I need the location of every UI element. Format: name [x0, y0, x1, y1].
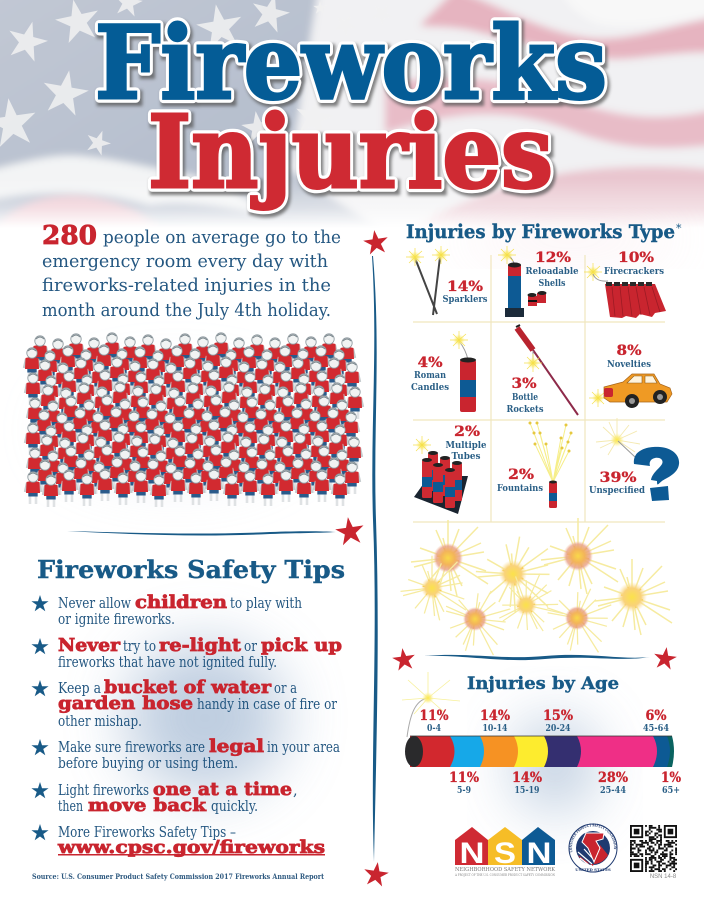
tip 1: to play with	[230, 596, 302, 612]
divider with stars above age chart	[391, 646, 678, 671]
age labels: bottom row	[449, 770, 681, 796]
age labels: bottom row: 15-19	[514, 786, 540, 796]
cell: bottle rockets	[506, 325, 578, 415]
tip 2: Never	[58, 635, 121, 656]
intro text block: emergency room every day with	[42, 251, 328, 272]
heading: injuries by type: Injuries by Fireworks Type	[406, 221, 675, 243]
cell: reloadable shells: Reloadable	[526, 267, 579, 277]
tip 2: try to	[123, 639, 156, 655]
logo: CPSC seal: UNITED STATES	[575, 867, 611, 872]
heading: injuries by type: *	[676, 222, 682, 235]
tip 1	[31, 592, 302, 628]
document code: NSN 14-8	[650, 874, 677, 880]
tip 4: Make sure fireworks are	[58, 740, 205, 756]
logo: neighborhood safety network	[454, 827, 556, 877]
logo: neighborhood safety network: N	[460, 837, 484, 870]
tip 3	[31, 677, 337, 730]
age labels: top row: 6%	[646, 708, 666, 724]
source note: Source: U.S. Consumer Product Safety Commission 2017 Fireworks Annual Report	[32, 872, 325, 881]
cell: reloadable shells: Shells	[538, 279, 566, 289]
logo: CPSC seal	[568, 823, 618, 872]
intro text block: month around the July 4th holiday.	[42, 300, 331, 321]
cell: bottle rockets: 3%	[512, 376, 536, 392]
cell: roman candles	[411, 331, 476, 412]
age labels: bottom row: 65+	[662, 786, 680, 796]
divider with star under crowd	[67, 515, 366, 546]
age labels: top row: 20-24	[546, 724, 570, 734]
tip 3: other mishap.	[58, 714, 142, 730]
age labels: top row: 14%	[480, 708, 510, 724]
cell: firecrackers: 10%	[618, 250, 654, 266]
age labels: top row: 0-4	[427, 724, 441, 734]
cell: roman candles: Roman	[414, 371, 446, 381]
cell: multiple tubes	[413, 424, 487, 514]
cell: sparklers: 14%	[447, 279, 483, 295]
cell: multiple tubes: Multiple	[446, 441, 487, 451]
age labels: top row: 15%	[543, 708, 573, 724]
panel: fireworks safety tips	[31, 555, 345, 858]
tip 6: website link: More Fireworks Safety Tips –	[58, 825, 236, 841]
logo: CPSC seal: CONSUMER PRODUCT SAFETY COMMISSION	[570, 823, 616, 852]
tip 4: before buying or using them.	[58, 756, 238, 772]
intro text block: 280	[42, 221, 97, 251]
age labels: top row: 11%	[420, 708, 448, 724]
tip 5: ,	[293, 783, 298, 799]
cell: novelties: 8%	[616, 343, 642, 359]
cell: sparklers	[406, 246, 488, 315]
tip 2: re-light	[159, 635, 242, 656]
cell: unspecified: 39%	[600, 470, 636, 486]
tip 5: quickly.	[211, 799, 258, 815]
tip 5: then	[58, 799, 83, 815]
cell: multiple tubes: 2%	[454, 424, 480, 440]
tip 6: website link: www.cpsc.gov/fireworks	[57, 837, 325, 858]
tip 2	[31, 635, 342, 671]
cell: firecrackers	[584, 250, 666, 318]
title line: Injuries: Injuries	[148, 93, 553, 211]
age labels: top row: 45-64	[643, 724, 669, 734]
tip 3: or a	[274, 681, 297, 697]
intro text block	[42, 221, 341, 321]
tip 3: Keep a	[58, 681, 101, 697]
intro text block: fireworks-related injuries in the	[42, 275, 331, 296]
cell: unspecified	[589, 418, 679, 501]
logo: neighborhood safety network: S	[494, 837, 516, 870]
title line: Injuries: Injuries	[150, 96, 555, 214]
cell: roman candles: Candles	[411, 383, 449, 393]
tip 3: bucket of water	[104, 677, 272, 698]
cell: multiple tubes: Tubes	[452, 452, 480, 462]
intro text block: people on average go to the	[103, 227, 341, 248]
cell: bottle rockets: Bottle	[512, 393, 538, 403]
logo: neighborhood safety network: N	[526, 837, 552, 870]
cell: roman candles: 4%	[418, 355, 442, 371]
title	[95, 4, 609, 214]
age labels: bottom row: 28%	[598, 770, 628, 786]
QR code	[630, 825, 677, 872]
logo: neighborhood safety network: A PROJECT OF THE U.S. CONSUMER PRODUCT SAFETY COMMISSION	[454, 873, 555, 877]
tip 6: website link	[31, 824, 325, 858]
cell: novelties: Novelties	[607, 360, 651, 370]
cell: novelties	[589, 343, 672, 408]
cell: reloadable shells	[498, 246, 579, 317]
age chart: firecracker bar	[402, 672, 674, 767]
crowd of 280 people	[24, 333, 363, 507]
tip 1: Never allow	[58, 596, 131, 612]
logo: neighborhood safety network: NEIGHBORHOOD SAFETY NETWORK	[455, 867, 556, 873]
cell: unspecified: Unspecified	[589, 486, 646, 496]
age labels: bottom row: 1%	[661, 770, 681, 786]
fireworks bursts illustration	[401, 518, 672, 664]
grid lines	[413, 255, 665, 522]
age labels: bottom row: 25-44	[600, 786, 626, 796]
tip 1: children	[135, 592, 227, 613]
tip 5: one at a time	[153, 779, 292, 800]
cell: fountains: 2%	[508, 467, 534, 483]
age labels: bottom row: 11%	[449, 770, 479, 786]
cell: fountains: Fountains	[497, 484, 543, 494]
tip 3: handy in case of fire or	[197, 697, 337, 713]
tip 2: fireworks that have not ignited fully.	[58, 655, 277, 671]
tip 2: or	[244, 639, 257, 655]
panel: injuries by fireworks type	[406, 221, 682, 522]
age labels: bottom row: 14%	[512, 770, 542, 786]
cell: sparklers: Sparklers	[442, 295, 488, 305]
cell: bottle rockets: Rockets	[506, 405, 544, 415]
cell: fountains	[497, 422, 572, 508]
tip 5	[31, 779, 298, 816]
title line: Injuries: Injuries	[148, 93, 553, 211]
age labels: top row: 10-14	[482, 724, 508, 734]
tip 4: in your area	[267, 740, 340, 756]
title line: Fireworks: Fireworks	[95, 4, 607, 122]
heading: injuries by age: Injuries by Age	[467, 674, 619, 694]
tip 2: pick up	[261, 635, 342, 656]
tip 5: Light fireworks	[58, 783, 149, 799]
center vertical divider with stars	[362, 228, 390, 887]
panel: injuries by age	[402, 672, 681, 796]
tip 4: legal	[209, 736, 264, 757]
heading: safety tips: Fireworks Safety Tips	[37, 555, 345, 584]
cell: firecrackers: Firecrackers	[604, 267, 664, 277]
tip 1: or ignite fireworks.	[58, 612, 175, 628]
age labels: top row	[420, 708, 669, 734]
title line: Fireworks: Fireworks	[97, 7, 609, 125]
tip 5: move back	[88, 795, 207, 816]
cell: reloadable shells: 12%	[535, 250, 571, 266]
tip 3: garden hose	[58, 693, 193, 714]
title line: Fireworks: Fireworks	[95, 4, 607, 122]
age labels: bottom row: 5-9	[457, 786, 471, 796]
tip 4	[31, 736, 340, 772]
